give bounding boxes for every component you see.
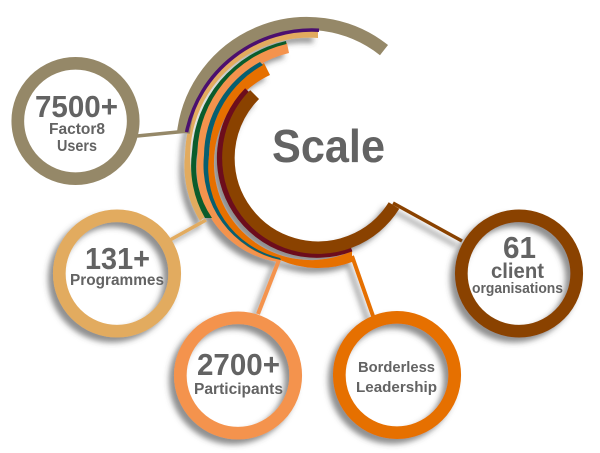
- stat: client organisations: 61: [503, 230, 536, 265]
- stat: factor8 users: [18, 63, 133, 179]
- stat: participants: [180, 318, 296, 433]
- arc: users: [183, 23, 384, 133]
- arc: dark red accent: [221, 91, 351, 254]
- stat: programmes: 131+: [85, 241, 150, 276]
- stat: programmes: Programmes: [70, 272, 164, 289]
- arc: green accent: [191, 41, 286, 218]
- stat: factor8 users: 7500+: [35, 89, 118, 124]
- title: Scale: [272, 120, 385, 172]
- arc: teal accent: [203, 62, 281, 260]
- arc: programmes: [184, 31, 318, 221]
- stat: participants: 2700+: [197, 347, 280, 382]
- connector: participants: [258, 260, 279, 314]
- stat: client organisations: organisations: [472, 280, 563, 297]
- stat: programmes: [59, 216, 175, 331]
- arc: participants: [197, 43, 289, 262]
- connector: leadership: [352, 256, 373, 316]
- arc: leadership: [207, 63, 352, 268]
- stat: borderless leadership: [339, 317, 455, 433]
- connector: organisations: [393, 203, 462, 241]
- stat: borderless leadership: Borderless: [358, 359, 435, 376]
- stat: client organisations: client: [491, 260, 544, 283]
- connector: programmes: [170, 220, 206, 240]
- stat: participants: Participants: [194, 381, 283, 398]
- stat: factor8 users: Users: [57, 138, 97, 155]
- connector: users: [137, 131, 188, 136]
- stat: client organisations: [461, 216, 577, 331]
- stat: borderless leadership: Leadership: [356, 379, 437, 396]
- stat: factor8 users: Factor8: [49, 121, 105, 138]
- arc: purple accent: [187, 30, 319, 132]
- nested arcs with connectors: [170, 31, 462, 316]
- arc: organisations: [228, 95, 394, 248]
